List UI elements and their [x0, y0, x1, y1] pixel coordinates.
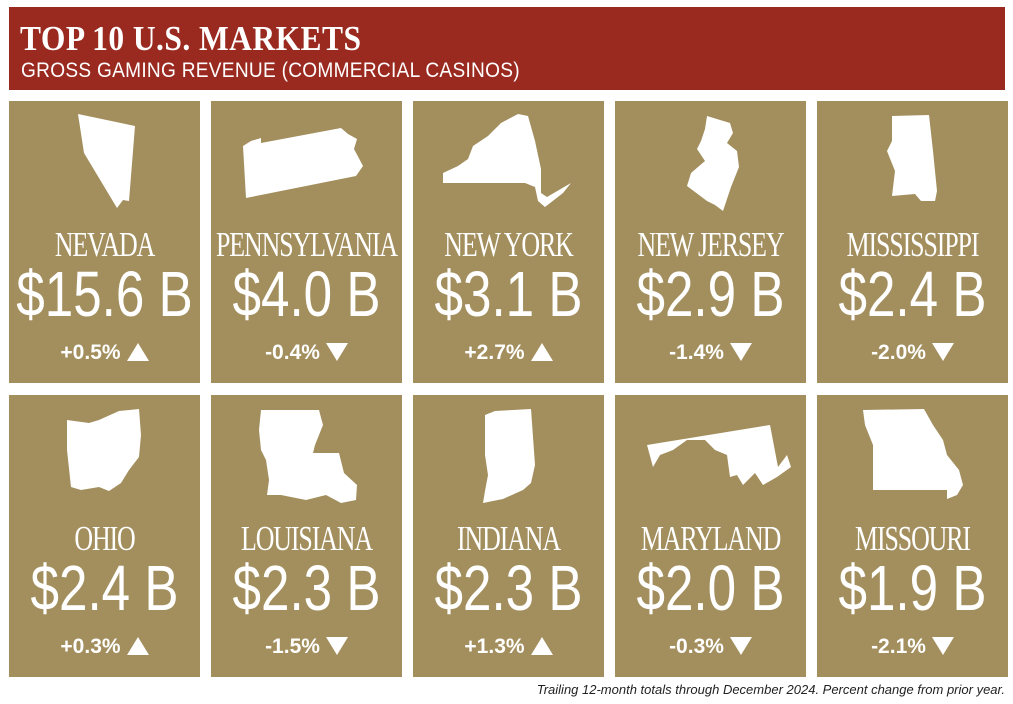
panel: Maryland	[615, 395, 806, 677]
value: $2.3 B	[434, 552, 583, 624]
change: -0.3%	[669, 635, 724, 658]
panel: Nevada	[9, 101, 200, 383]
panel: Ohio	[9, 395, 200, 677]
value: $4.0 B	[232, 258, 381, 330]
change: +1.3%	[464, 635, 525, 658]
panel: New Jersey	[615, 101, 806, 383]
name: NEW JERSEY	[638, 225, 783, 264]
footnote: Trailing 12-month totals through December 2024. Percent change from prior year.	[537, 682, 1005, 697]
value: $2.9 B	[636, 258, 785, 330]
icon: Maryland map	[647, 425, 791, 485]
icon: Nevada map	[78, 114, 135, 208]
value: $2.3 B	[232, 552, 381, 624]
icon: Louisiana map	[259, 410, 357, 503]
name: INDIANA	[457, 519, 560, 558]
change	[60, 341, 149, 364]
name: NEVADA	[55, 225, 154, 264]
name: MARYLAND	[641, 519, 780, 558]
panel: New York	[413, 101, 604, 383]
value: $3.1 B	[434, 258, 583, 330]
change	[871, 635, 954, 658]
change: -1.4%	[669, 341, 724, 364]
name: NEW YORK	[444, 225, 573, 264]
change: -1.5%	[265, 635, 320, 658]
panel: Louisiana	[211, 395, 402, 677]
value: $15.6 B	[16, 258, 193, 330]
value: $2.0 B	[636, 552, 785, 624]
change: -2.1%	[871, 635, 926, 658]
value: $1.9 B	[838, 552, 987, 624]
title: TOP 10 U.S. MARKETS	[20, 19, 361, 58]
icon: Indiana map	[483, 409, 535, 503]
change: -2.0%	[871, 341, 926, 364]
change: -0.4%	[265, 341, 320, 364]
change	[265, 341, 348, 364]
change	[464, 635, 553, 658]
name: MISSOURI	[855, 519, 970, 558]
name: PENNSYLVANIA	[216, 225, 397, 264]
value: $2.4 B	[30, 552, 179, 624]
icon: Mississippi map	[887, 115, 937, 201]
icon: New Jersey map	[687, 116, 739, 211]
change: +0.3%	[60, 635, 121, 658]
subtitle: GROSS GAMING REVENUE (COMMERCIAL CASINOS)	[21, 59, 520, 82]
icon: Pennsylvania map	[243, 128, 363, 198]
change	[60, 635, 149, 658]
name: LOUISIANA	[241, 519, 372, 558]
panel: Mississippi	[817, 101, 1008, 383]
change: +0.5%	[60, 341, 121, 364]
icon: New York map	[443, 114, 571, 207]
value: $2.4 B	[838, 258, 987, 330]
icon: Ohio map	[67, 409, 141, 491]
change	[871, 341, 954, 364]
panel: Missouri	[817, 395, 1008, 677]
name: OHIO	[74, 519, 135, 558]
icon: Missouri map	[863, 409, 963, 499]
change	[265, 635, 348, 658]
panel: Indiana	[413, 395, 604, 677]
name: MISSISSIPPI	[847, 225, 978, 264]
change	[669, 341, 752, 364]
change	[669, 635, 752, 658]
panel: Pennsylvania	[211, 101, 402, 383]
change: +2.7%	[464, 341, 525, 364]
header banner	[9, 7, 1005, 90]
change	[464, 341, 553, 364]
